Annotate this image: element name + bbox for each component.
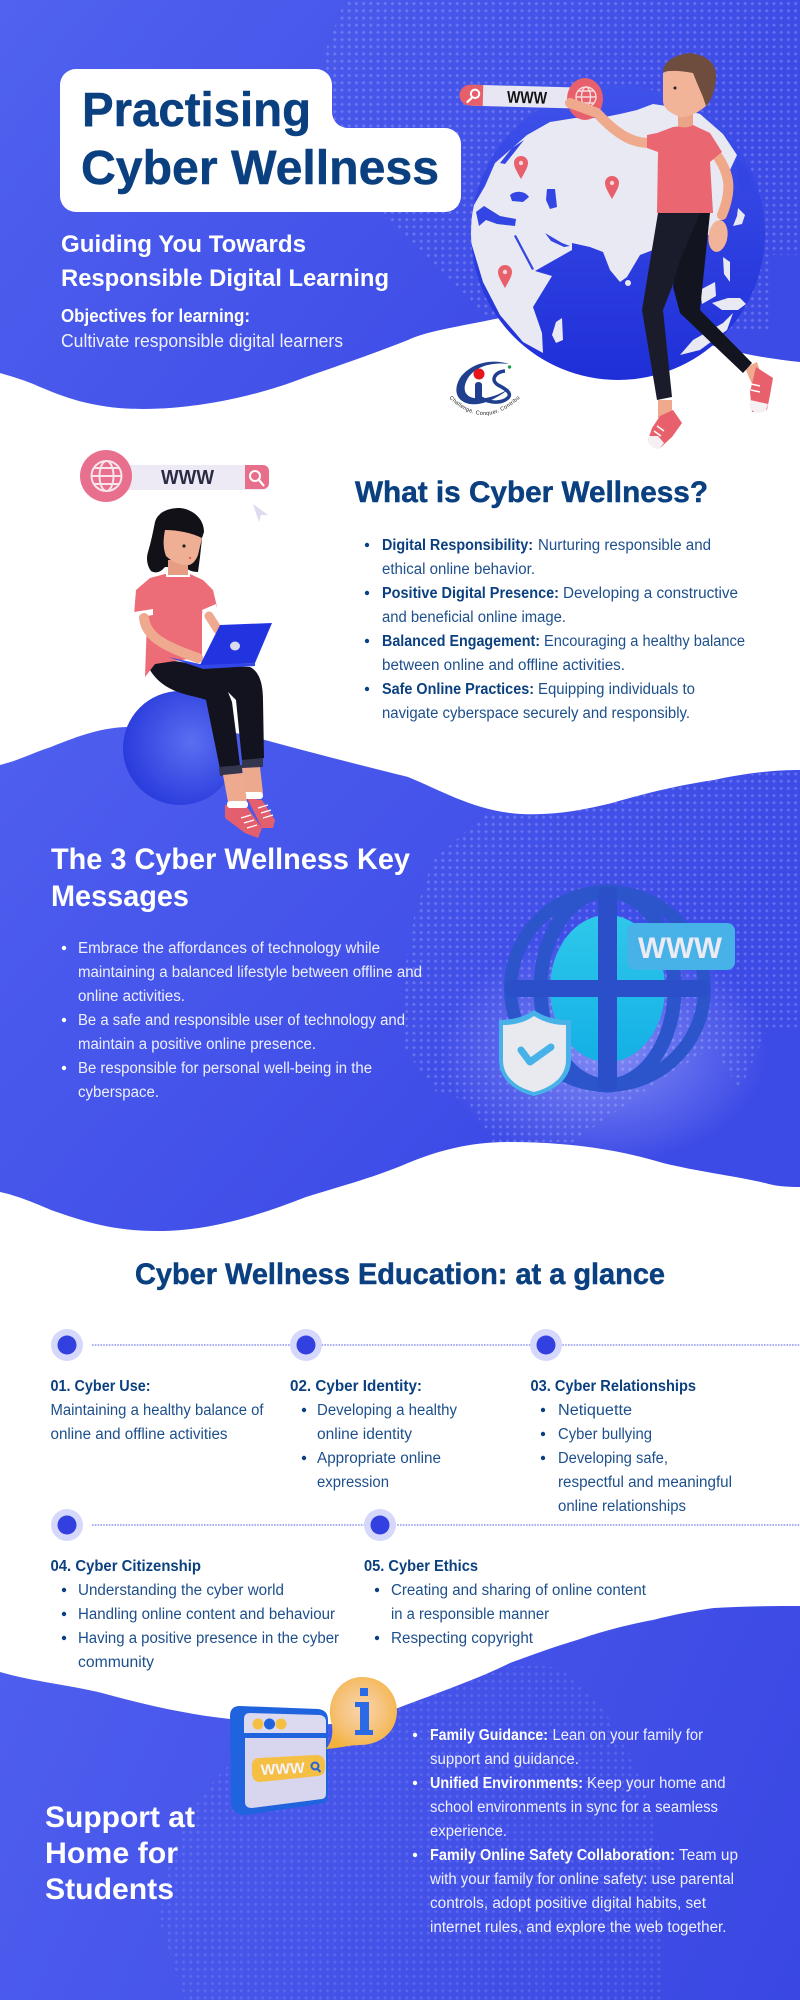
heading: key messages	[51, 843, 410, 913]
woman: laptop	[168, 623, 272, 669]
icon: map pin 3	[498, 265, 512, 288]
list: what is cyber wellness: Positive Digital Presence:	[382, 585, 559, 602]
woman: collar and sleeve cuffs	[134, 574, 217, 618]
man: front shoe	[648, 410, 682, 449]
list: support at home: Unified Environments:	[430, 1775, 583, 1792]
block: 03 cyber relationships: Netiquette	[558, 1402, 632, 1419]
title text: Cyber Wellness	[81, 142, 439, 195]
block: 01 cyber use	[50, 1378, 264, 1443]
man: hand	[706, 219, 730, 253]
block: 04 cyber citizenship: 04. Cyber Citizenship	[50, 1558, 201, 1575]
list: what is cyber wellness: Safe Online Practices:	[382, 681, 534, 698]
list: what is cyber wellness	[365, 537, 745, 722]
icon: map pin 2	[605, 176, 619, 199]
title text: Practising	[82, 84, 311, 137]
icon: info speech bubble	[326, 1677, 397, 1749]
icon: map pin 1	[514, 156, 528, 179]
woman: front shoe	[225, 801, 262, 838]
man: pointing arm	[570, 103, 650, 143]
list: key messages: Embrace the affordances of technology while	[78, 940, 380, 957]
list: support at home: controls, adopt positive digital habits, set	[430, 1895, 707, 1912]
woman: face	[164, 530, 202, 565]
heading: support at home: Support at	[45, 1801, 195, 1834]
man: neck	[678, 112, 693, 127]
block: 05 cyber ethics: Respecting copyright	[391, 1630, 534, 1647]
www tag: WWW	[638, 932, 723, 965]
man: hair	[663, 53, 716, 106]
timeline row 2	[51, 1509, 800, 1541]
list: what is cyber wellness: Nurturing responsible and	[538, 537, 711, 554]
list: what is cyber wellness: ethical online behavior.	[382, 561, 535, 578]
list: what is cyber wellness: Equipping individuals to	[538, 681, 695, 698]
list: what is cyber wellness: Digital Responsibility:	[382, 537, 533, 554]
block: 05 cyber ethics: Creating and sharing of online content	[391, 1582, 647, 1599]
heading: support at home: Students	[45, 1873, 174, 1906]
list: support at home: Team up	[679, 1847, 738, 1864]
block: 02 cyber identity: online identity	[317, 1426, 412, 1443]
list: key messages: online activities.	[78, 988, 185, 1005]
block: 03 cyber relationships: Developing safe,	[558, 1450, 668, 1467]
block: 04 cyber citizenship: Understanding the cyber world	[78, 1582, 284, 1599]
search bar icon above woman: WWW	[161, 467, 214, 489]
objectives text	[61, 306, 343, 351]
search bar icon above woman	[80, 450, 269, 502]
block: 05 cyber ethics	[364, 1558, 647, 1647]
block: 03 cyber relationships: Cyber bullying	[558, 1426, 652, 1443]
block: 01 cyber use: Maintaining a healthy balance of	[50, 1402, 264, 1419]
icon: wireframe globe with www tag and shield	[499, 887, 735, 1096]
list: key messages	[62, 940, 422, 1101]
list: support at home: Keep your home and	[587, 1775, 726, 1792]
icon: cursor	[253, 504, 268, 522]
man: right leg	[673, 213, 752, 373]
heading: support at home	[45, 1801, 195, 1906]
heading: key messages: The 3 Cyber Wellness Key	[51, 843, 410, 876]
list: what is cyber wellness: Encouraging a healthy balance	[544, 633, 745, 650]
list: support at home: school environments in sync for a seamless	[430, 1799, 718, 1816]
woman: legs	[150, 661, 264, 769]
objectives text: Cultivate responsible digital learners	[61, 331, 343, 351]
illustration: woman on ball with laptop	[123, 508, 275, 838]
list: key messages: Be responsible for personal well-being in the	[78, 1060, 372, 1077]
list: what is cyber wellness: Balanced Engagement:	[382, 633, 540, 650]
man: rear ankle	[745, 362, 762, 384]
subtitle	[61, 231, 389, 292]
panel: support background	[0, 1606, 800, 2000]
heading: what is cyber wellness: What is Cyber Wellness?	[355, 476, 708, 509]
subtitle: Guiding You Towards	[61, 231, 306, 258]
block: 02 cyber identity: Developing a healthy	[317, 1402, 457, 1419]
woman: rear ankle	[242, 767, 263, 793]
block: 02 cyber identity	[290, 1378, 457, 1491]
woman: neck	[168, 560, 188, 575]
block: 02 cyber identity: 02. Cyber Identity:	[290, 1378, 422, 1395]
block: 02 cyber identity: expression	[317, 1474, 389, 1491]
block: 05 cyber ethics: 05. Cyber Ethics	[364, 1558, 478, 1575]
woman: rear shoe	[243, 792, 275, 828]
list: what is cyber wellness: Developing a constructive	[563, 585, 738, 602]
block: 02 cyber identity: Appropriate online	[317, 1450, 441, 1467]
icon: search bar in header	[459, 78, 603, 120]
list: support at home: Lean on your family for	[552, 1727, 703, 1744]
list: what is cyber wellness: navigate cyberspace securely and responsibly.	[382, 705, 690, 722]
block: 05 cyber ethics: in a responsible manner	[391, 1606, 549, 1623]
woman: left arm	[144, 618, 198, 658]
block: 04 cyber citizenship: Having a positive presence in the cyber	[78, 1630, 339, 1647]
man: rear shoe	[750, 367, 773, 413]
woman: shirt	[134, 574, 217, 677]
heading: key messages: Messages	[51, 880, 189, 913]
woman: hair	[147, 508, 204, 572]
woman: front ankle	[223, 773, 247, 802]
panel: key messages background	[0, 726, 800, 1231]
list: support at home: with your family for online safety: use parental	[429, 1871, 734, 1888]
heading: education at a glance: Cyber Wellness Education: at a glance	[135, 1258, 665, 1291]
block: 04 cyber citizenship: community	[78, 1654, 154, 1671]
woman: cuffs	[219, 758, 263, 776]
shield with check	[499, 1010, 571, 1096]
list: support at home: Family Guidance:	[430, 1727, 548, 1744]
icon: browser window	[230, 1706, 328, 1815]
icon: school logo: Challenge. Conquer. Contribute	[450, 396, 520, 416]
icon: school logo	[450, 362, 520, 416]
woman: right arm	[209, 616, 218, 630]
man: left leg	[642, 213, 700, 400]
block: 01 cyber use: online and offline activities	[50, 1426, 228, 1443]
heading: support at home: Home for	[45, 1837, 178, 1870]
timeline row 1	[51, 1329, 800, 1361]
block: 04 cyber citizenship: Handling online content and behaviour	[78, 1606, 335, 1623]
subtitle: Responsible Digital Learning	[61, 265, 389, 292]
man: ankle	[658, 400, 672, 418]
list: key messages: maintain a positive online presence.	[78, 1036, 316, 1053]
icon: browser window: WWW	[260, 1760, 306, 1779]
list: support at home: Family Online Safety Collaboration:	[430, 1847, 675, 1864]
block: 01 cyber use: 01. Cyber Use:	[50, 1378, 150, 1395]
woman: exercise ball	[123, 691, 237, 805]
list: support at home: experience.	[430, 1823, 507, 1840]
list: key messages: maintaining a balanced lifestyle between offline and	[78, 964, 422, 981]
icon: search bar in header: WWW	[507, 88, 548, 108]
man: lowered arm	[718, 157, 728, 215]
block: 03 cyber relationships: 03. Cyber Relationships	[530, 1378, 696, 1395]
list: key messages: Be a safe and responsible user of technology and	[78, 1012, 405, 1029]
block: 04 cyber citizenship	[50, 1558, 339, 1671]
block: 03 cyber relationships: online relationships	[558, 1498, 686, 1515]
list: key messages: cyberspace.	[78, 1084, 159, 1101]
list: what is cyber wellness: between online and offline activities.	[382, 657, 625, 674]
block: 03 cyber relationships	[530, 1378, 732, 1515]
man: face	[663, 68, 708, 117]
www tag	[627, 923, 735, 970]
list: what is cyber wellness: and beneficial online image.	[382, 609, 566, 626]
man: shirt	[647, 125, 722, 213]
block: 03 cyber relationships: respectful and meaningful	[558, 1474, 732, 1491]
list: support at home: internet rules, and explore the web together.	[430, 1919, 726, 1936]
title text	[81, 84, 439, 195]
title box	[60, 69, 461, 212]
icon: globe with continents	[468, 86, 765, 380]
objectives text: Objectives for learning:	[61, 306, 250, 326]
list: support at home	[413, 1727, 738, 1936]
list: support at home: support and guidance.	[430, 1751, 579, 1768]
illustration: man pointing at globe	[570, 53, 773, 449]
panel: header background	[0, 0, 800, 409]
